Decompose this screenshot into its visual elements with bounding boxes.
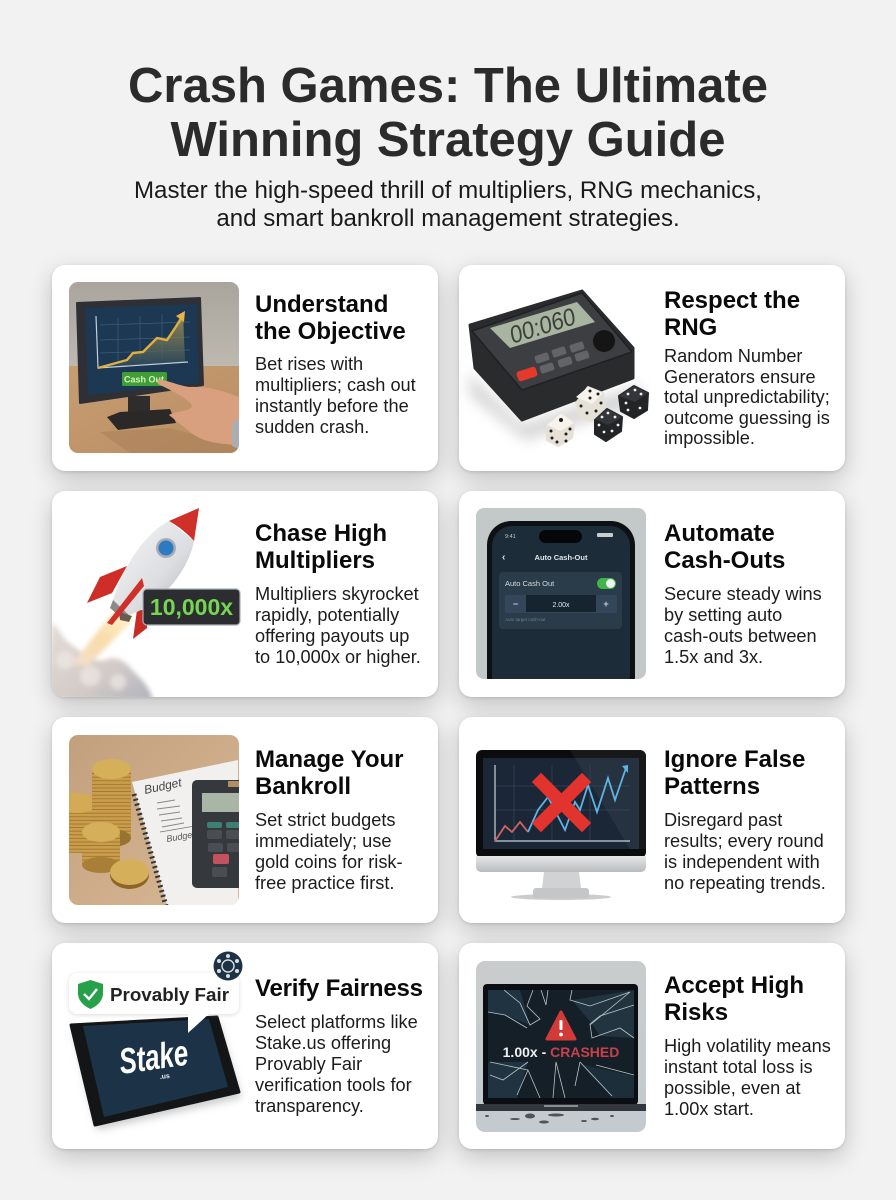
debris [485, 1114, 614, 1124]
panel: understand the objective [52, 265, 438, 471]
heading: Bankroll [255, 773, 351, 800]
white die 2 [576, 387, 605, 421]
heading: Automate [664, 520, 775, 547]
heading [664, 287, 800, 341]
description [255, 584, 421, 667]
title: Winning Strategy Guide [171, 113, 725, 167]
description: multipliers; cash out [255, 375, 416, 395]
knob [593, 330, 615, 352]
flame [72, 606, 133, 666]
heading: Accept High [664, 972, 804, 999]
description: rapidly, potentially [255, 605, 399, 625]
description: 1.5x and 3x. [664, 647, 763, 667]
heading [255, 520, 387, 574]
description: is independent with [664, 852, 820, 872]
illustration: RNG device and dice [464, 290, 649, 447]
subtitle [134, 177, 762, 232]
smoke [48, 606, 153, 700]
illustration: tablet with provably fair bubble [68, 952, 243, 1132]
description [664, 584, 822, 667]
red X [541, 782, 582, 823]
icon: shield [78, 980, 103, 1009]
tablet: Stake [117, 1033, 191, 1082]
auto cash out panel: Auto Cash Out [505, 579, 555, 588]
notebook [132, 760, 238, 906]
panel: manage your bankroll [52, 717, 438, 923]
description: outcome guessing is [664, 408, 830, 428]
heading [664, 972, 804, 1026]
10,000x label [143, 589, 240, 625]
description: to 10,000x or higher. [255, 647, 421, 667]
heading: Understand [255, 291, 388, 318]
panel: accept high risks [459, 943, 845, 1149]
auto cash out panel: + [603, 599, 609, 609]
heading: RNG [664, 314, 717, 341]
monitor [476, 750, 646, 900]
cracks [488, 990, 634, 1098]
red button [516, 366, 538, 382]
description: Select platforms like [255, 1012, 418, 1032]
heading [664, 746, 805, 800]
heading [255, 746, 404, 800]
heading: Verify Fairness [255, 975, 423, 1002]
description: transparency. [255, 1096, 364, 1116]
description: impossible. [664, 428, 755, 448]
display [490, 302, 595, 349]
panel: verify fairness [52, 943, 438, 1149]
heading: Risks [664, 999, 728, 1026]
auto cash out panel [499, 572, 622, 629]
heading [664, 520, 785, 574]
heading [255, 291, 406, 345]
description [255, 354, 416, 437]
phone: Auto Cash-Out [535, 553, 588, 562]
heading: Manage Your [255, 746, 403, 773]
description: gold coins for risk- [255, 852, 403, 872]
description: Stake.us offering [255, 1033, 391, 1053]
speech bubble: Provably Fair [110, 984, 230, 1005]
icon: network badge [214, 952, 242, 980]
description: High volatility means [664, 1036, 831, 1056]
heading: Respect the [664, 287, 800, 314]
black die 2 [619, 386, 648, 418]
description: Random Number [664, 346, 802, 366]
description: Set strict budgets [255, 810, 396, 830]
chart [96, 311, 190, 368]
description: instant total loss is [664, 1057, 813, 1077]
crashed text: 1.00x - CRASHED [503, 1044, 619, 1060]
description: Multipliers skyrocket [255, 584, 419, 604]
panel: automate cash-outs [459, 491, 845, 697]
description: results; every round [664, 831, 824, 851]
subtitle: Master the high-speed thrill of multipliers, RNG mechanics, [134, 177, 762, 204]
description: cash-outs between [664, 626, 817, 646]
heading: Cash-Outs [664, 547, 785, 574]
laptop [476, 984, 646, 1111]
icon: warning triangle [547, 1012, 575, 1039]
phone: ‹ [502, 552, 505, 563]
subtitle: and smart bankroll management strategies. [216, 205, 680, 232]
panel: chase high multipliers [52, 491, 438, 697]
illustration: desktop monitor with crossed out chart [476, 750, 646, 900]
title [128, 59, 768, 167]
panel: ignore false patterns [459, 717, 845, 923]
description [255, 810, 403, 893]
description: verification tools for [255, 1075, 412, 1095]
coin stacks [69, 759, 149, 889]
tablet: .us [159, 1073, 170, 1081]
heading: Ignore False [664, 746, 805, 773]
monitor [77, 298, 203, 403]
phone: 9:41 [505, 534, 516, 540]
notebook: Budget [166, 829, 196, 844]
device [470, 291, 633, 420]
description: Generators ensure [664, 366, 816, 386]
calculator [192, 780, 239, 888]
speech bubble [69, 973, 239, 1033]
phone [487, 521, 635, 679]
cash out button: Cash Out [124, 374, 164, 384]
auto cash out panel: − [513, 599, 518, 609]
heading: the Objective [255, 318, 406, 345]
description: Secure steady wins [664, 584, 822, 604]
hand [157, 379, 239, 449]
title: Crash Games: The Ultimate [128, 59, 768, 113]
auto cash out panel: 2.00x [552, 602, 570, 609]
10,000x label: 10,000x [150, 594, 233, 620]
rocket [87, 508, 199, 639]
description [664, 1036, 831, 1119]
illustration: coins, notebook and calculator [69, 735, 239, 905]
description: Provably Fair [255, 1054, 362, 1074]
description: 1.00x start. [664, 1099, 754, 1119]
description [664, 346, 830, 448]
illustration: phone auto cash out screen [476, 508, 646, 679]
illustration: monitor with cash out button [69, 282, 239, 453]
description: by setting auto [664, 605, 782, 625]
auto cash out panel: Auto target cash-out [505, 617, 546, 622]
chart [495, 765, 630, 841]
black die [595, 409, 622, 441]
heading: Multipliers [255, 547, 375, 574]
description: immediately; use [255, 831, 391, 851]
illustration: rocket with 10,000x label [52, 508, 241, 697]
cash out button [122, 372, 167, 386]
description: Disregard past [664, 810, 782, 830]
heading: Patterns [664, 773, 760, 800]
illustration: cracked laptop screen [476, 961, 646, 1132]
display: 00:060 [508, 302, 577, 349]
description: total unpredictability; [664, 387, 830, 407]
description: instantly before the [255, 396, 409, 416]
description: Bet rises with [255, 354, 363, 374]
description [664, 810, 826, 893]
description: possible, even at [664, 1078, 800, 1098]
monitor stand [107, 396, 176, 430]
description: free practice first. [255, 873, 394, 893]
description [255, 1012, 418, 1116]
description: sudden crash. [255, 417, 369, 437]
tablet [71, 1017, 241, 1130]
heading: Chase High [255, 520, 387, 547]
notebook: Budget [143, 775, 183, 797]
description: no repeating trends. [664, 873, 826, 893]
panel: respect the RNG [459, 265, 845, 471]
buttons [534, 341, 590, 374]
white die [547, 413, 574, 446]
description: offering payouts up [255, 626, 409, 646]
